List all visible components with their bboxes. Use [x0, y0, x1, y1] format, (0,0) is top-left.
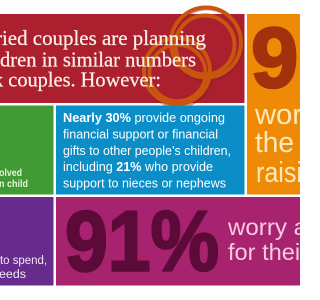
panel: red married couples [0, 8, 244, 106]
panel: orange stat [247, 11, 320, 194]
purple panel text: to spend, [0, 255, 47, 267]
blue panel text: financial support or financial [63, 128, 218, 142]
heading text: dren in similar numbers [0, 48, 196, 72]
magenta big number: 91% [65, 194, 219, 290]
panel: magenta stat [56, 194, 308, 290]
panel: blue financial support [56, 106, 244, 194]
panel: purple stat [0, 197, 54, 286]
green panel text [0, 167, 28, 190]
icon: interlocking rings [144, 8, 242, 106]
green panel text: n child [0, 178, 28, 190]
blue panel text: support to nieces or nephews [63, 176, 226, 190]
panel: green stat [0, 106, 54, 194]
heading text [0, 26, 206, 92]
blue panel text [63, 111, 231, 190]
magenta panel text [227, 214, 308, 265]
blue panel text: including 21% who provide [63, 160, 213, 174]
heading text: ried couples are planning [0, 26, 206, 50]
purple panel text [0, 255, 47, 281]
orange panel text [254, 99, 302, 189]
blue panel text: Nearly 30% provide ongoing [63, 111, 225, 125]
blue panel text: gifts to other people’s children, [63, 144, 231, 158]
orange panel text: the [255, 127, 294, 159]
